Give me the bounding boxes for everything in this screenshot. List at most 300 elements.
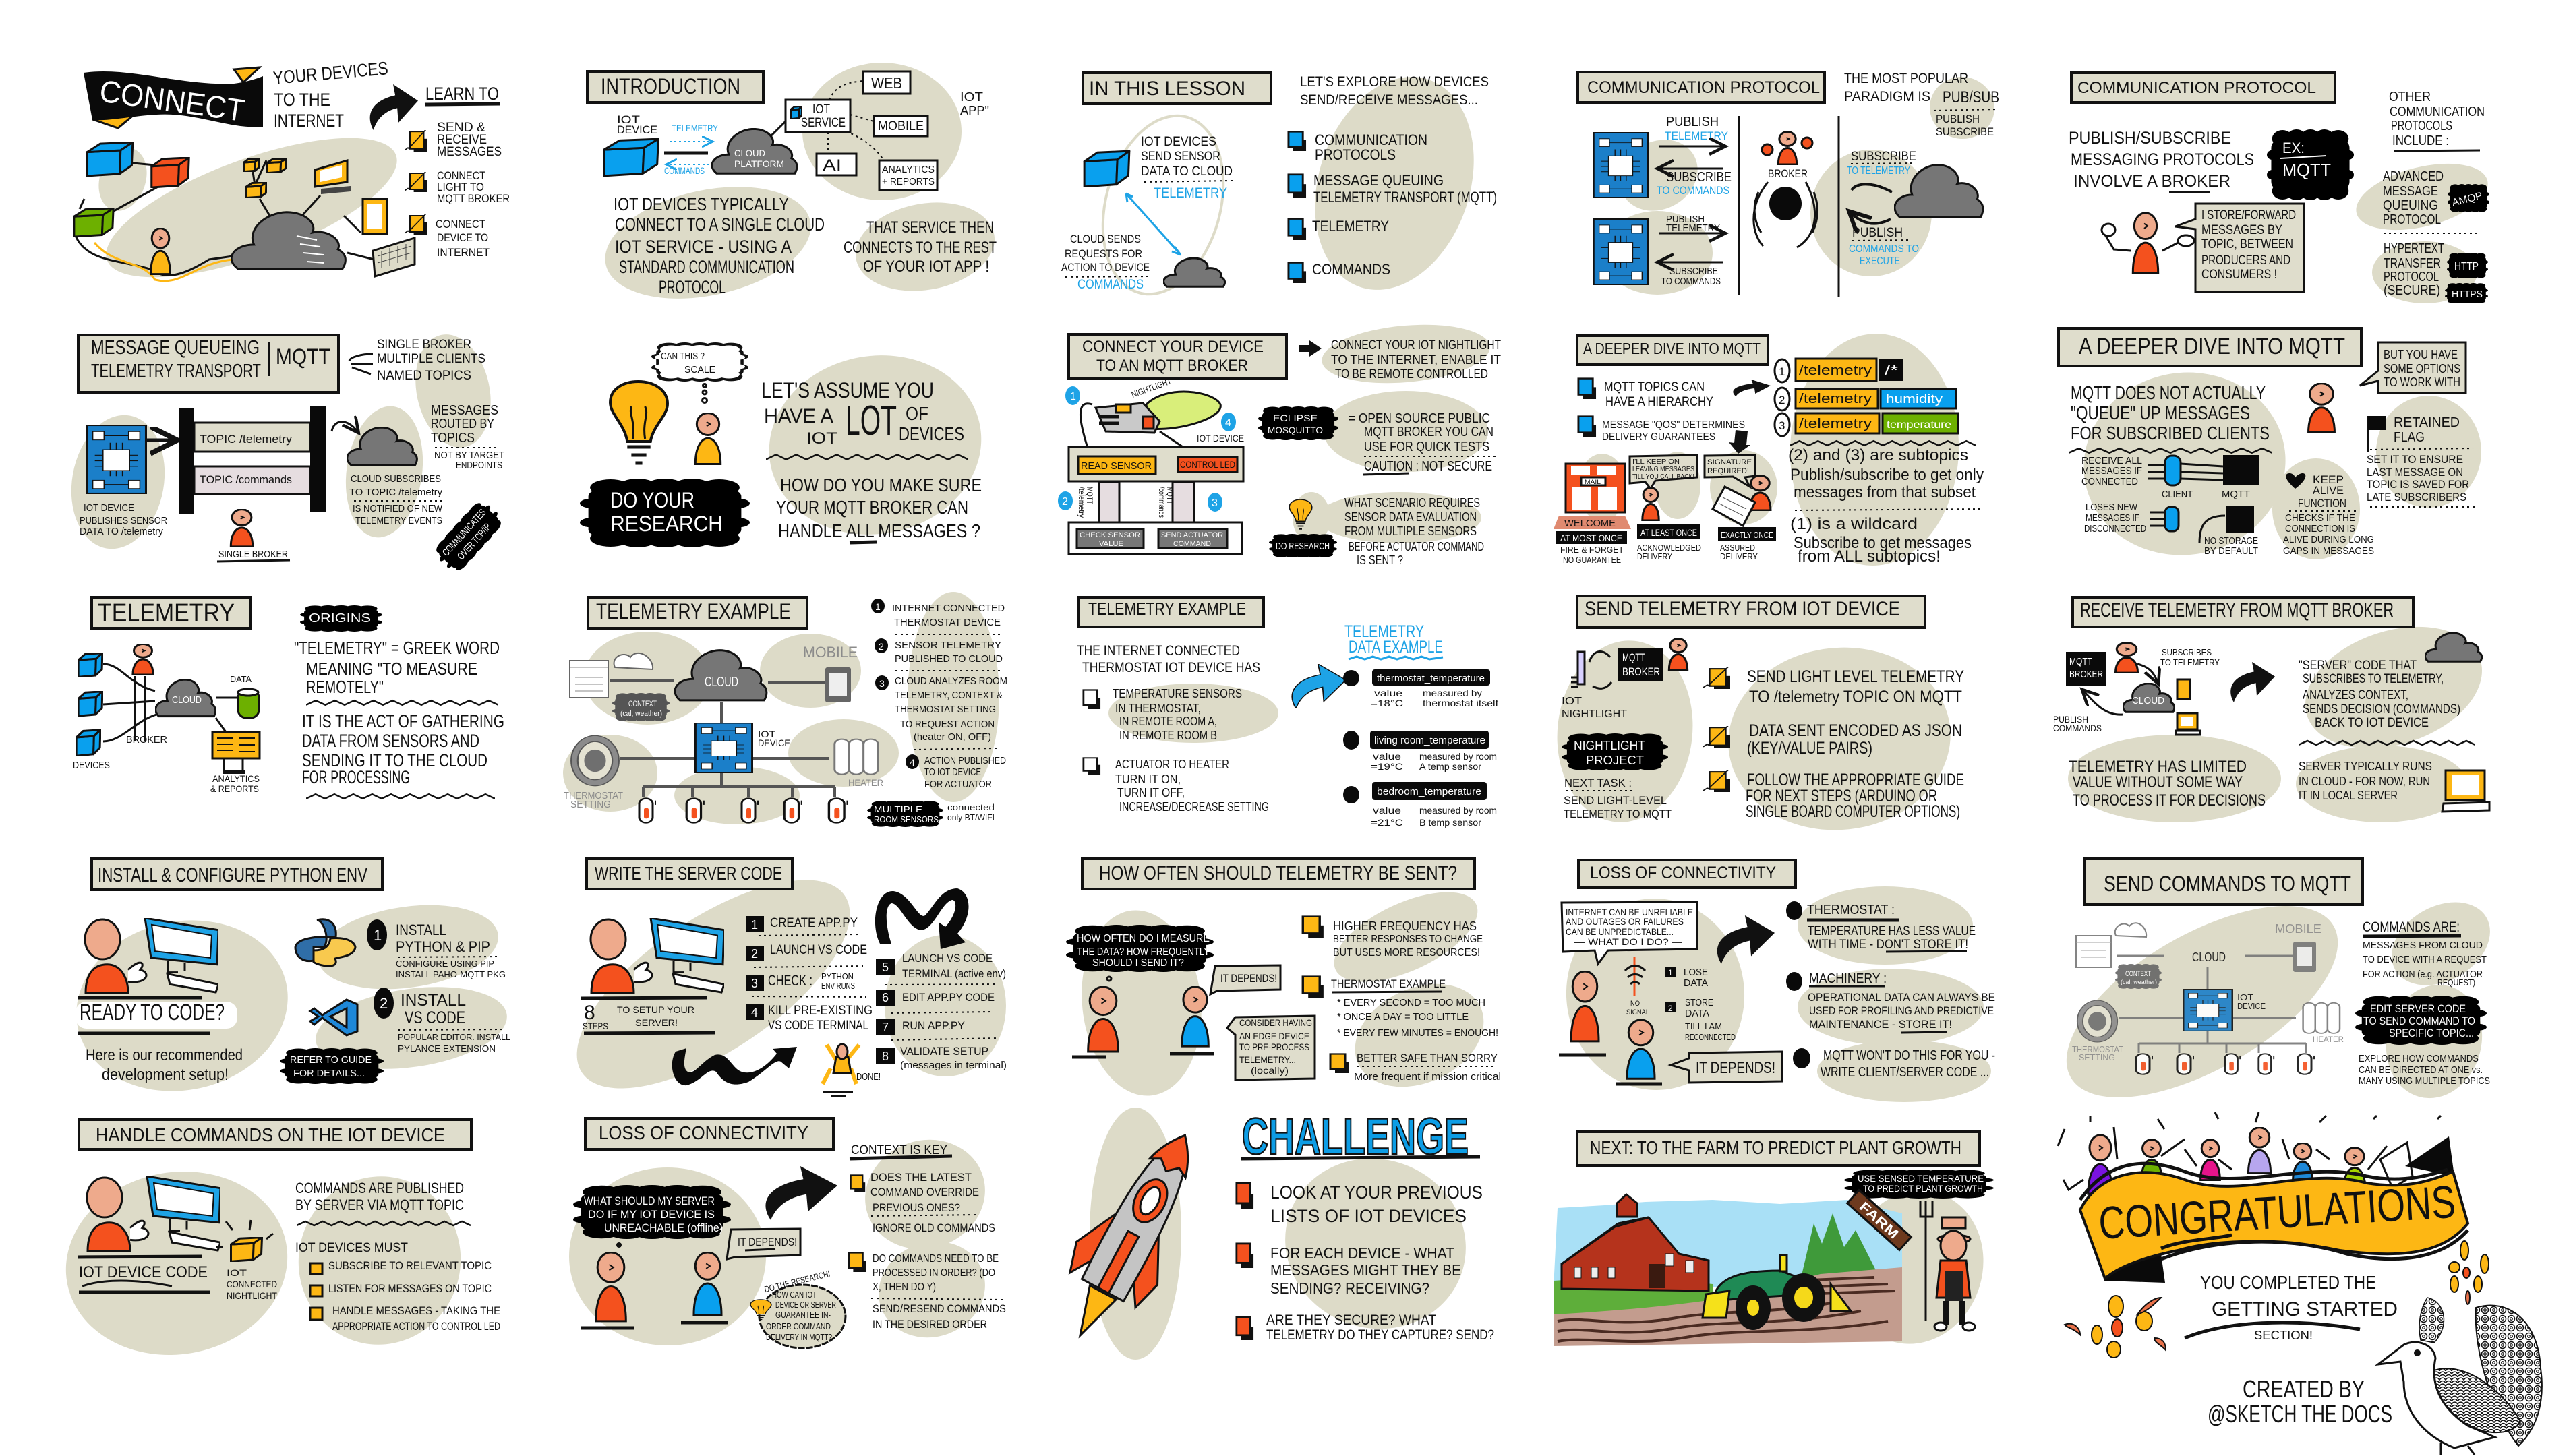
telemetry data example: =18°C (1371, 698, 1403, 708)
numbered steps: ENV RUNS (821, 981, 855, 991)
panel: congratulations (2058, 1112, 2542, 1455)
step 1: 1 (374, 927, 382, 944)
numbered explanation: THERMOSTAT DEVICE (894, 617, 1001, 628)
text blocks: IT IN LOCAL SERVER (2299, 789, 2398, 802)
ready to code (76, 998, 243, 1084)
next task: NEXT TASK : (1564, 777, 1632, 789)
completion text: SECTION! (2254, 1329, 2313, 1342)
learn to list: DEVICE TO (437, 231, 488, 244)
step numbers: 3 (1212, 497, 1218, 509)
device to broker diagram: DATA TO /telemetry (80, 526, 163, 537)
cloud subscribe publish: PUBLISH (1852, 226, 1903, 240)
iot chips publish subscribe: PUBLISH (1666, 115, 1719, 129)
device to broker diagram: TOPIC /commands (200, 473, 292, 486)
description: TURN IT ON, (1115, 772, 1181, 786)
features list: NAMED TOPICS (377, 369, 471, 383)
numbered steps: VALIDATE SETUP (900, 1045, 988, 1058)
text block: LET'S ASSUME YOU (761, 378, 934, 402)
person (695, 413, 721, 464)
mqtt flow boxes (1069, 447, 1243, 554)
client mqtt diagram (2081, 455, 2259, 557)
numbered steps: KILL PRE-EXISTING (768, 1004, 873, 1018)
callout: mqtt example: MQTT (2282, 160, 2331, 180)
farm sign (1847, 1190, 1911, 1250)
panel: connect your device (1058, 318, 1501, 567)
device network illustration (74, 142, 415, 281)
telemetry data example: A temp sensor (1419, 761, 1481, 772)
title (2084, 859, 2363, 905)
people (1559, 957, 1662, 1084)
panel: deeper dive topics (1554, 331, 1984, 568)
subtopic explanation: (1) is a wildcard (1790, 515, 1918, 533)
speech: edge device: (locally) (1251, 1065, 1289, 1076)
numbered explanation: 3 (879, 678, 885, 689)
nightlight to broker diagram: IOT (1562, 696, 1582, 707)
research cloud (750, 1269, 846, 1348)
mqtt flow boxes: VALUE (1099, 540, 1123, 548)
mqtt flow boxes: SEND ACTUATOR (1161, 531, 1223, 539)
text block: HAVE A (764, 405, 833, 427)
text block: HOW DO YOU MAKE SURE (780, 475, 982, 495)
thought bubble: SHOULD I SEND IT? (1092, 957, 1184, 969)
speaker and speech bubble: SOME OPTIONS (2384, 362, 2460, 375)
panel: loss of connectivity thermostat (1559, 860, 1995, 1102)
thermostat system diagram: CONTEXT (628, 699, 657, 708)
text block: HANDLE ALL MESSAGES ? (778, 520, 980, 541)
considerations list: * EVERY SECOND = TOO MUCH (1337, 997, 1485, 1008)
numbered explanation: 1 (875, 601, 881, 612)
background blobs (61, 328, 500, 556)
iot app diagram (604, 71, 989, 190)
commands text: REQUEST) (2437, 977, 2475, 988)
cloud subscribe publish: EXECUTE (1860, 255, 1900, 267)
keep alive function (2283, 473, 2374, 557)
cloud subscribe publish (1847, 150, 1983, 267)
considerations list: HIGHER FREQUENCY HAS (1333, 919, 1477, 933)
thought bubble: THE DATA? HOW FREQUENTLY (1077, 946, 1210, 958)
thermostat system diagram (564, 644, 883, 822)
background blobs (60, 894, 512, 1110)
title: MQTT (276, 344, 330, 369)
thermostat and machinery text: MQTT WON'T DO THIS FOR YOU - (1823, 1048, 1995, 1063)
cheering people (2058, 1112, 2441, 1194)
numbered steps: 2 (751, 947, 758, 961)
description: IN REMOTE ROOM B (1119, 729, 1217, 742)
numbered explanation: 2 (879, 641, 884, 652)
numbered steps: CHECK : (768, 972, 812, 989)
background blobs (2068, 605, 2497, 822)
text block: YOUR MQTT BROKER CAN (776, 497, 968, 518)
numbered explanation: TO REQUEST ACTION (900, 719, 995, 730)
main text: FOR SUBSCRIBED CLIENTS (2071, 423, 2270, 444)
pub sub text (2069, 129, 2254, 192)
step 2: POPULAR EDITOR. INSTALL (398, 1032, 510, 1042)
background blobs (1602, 71, 1999, 295)
instructions text: WHAT SCENARIO REQUIRES (1344, 496, 1480, 510)
context is key text: SEND/RESEND COMMANDS (873, 1302, 1006, 1315)
retained flag: LATE SUBSCRIBERS (2367, 491, 2466, 504)
title: MESSAGE QUEUEING (91, 337, 260, 359)
iot app diagram: APP" (960, 104, 989, 117)
callout: edit server code: TO SEND COMMAND TO (2363, 1014, 2475, 1027)
title: LOSS OF CONNECTIVITY (599, 1122, 808, 1143)
step 1: INSTALL (396, 921, 446, 938)
qos levels: ACKNOWLEDGED (1637, 543, 1701, 553)
thermostat system diagram: SETTING (570, 799, 611, 810)
title (2071, 73, 2335, 102)
telemetry loop diagram: DATA TO CLOUD (1141, 164, 1233, 179)
iot chips publish subscribe: TO COMMANDS (1661, 276, 1721, 287)
broker and cloud diagram (2053, 642, 2220, 735)
numbered explanation: INTERNET CONNECTED (892, 603, 1005, 614)
research cloud: DELIVERY IN MQTT? (766, 1332, 832, 1342)
telemetry data example: living room_temperature (1374, 735, 1485, 746)
command system diagram: CONTEXT (2125, 970, 2151, 978)
iot nightlight cube (216, 1220, 277, 1301)
qos levels (1554, 455, 1776, 565)
completion text: GETTING STARTED (2212, 1298, 2398, 1321)
other protocols: HTTP (2454, 261, 2479, 272)
device to broker diagram: CLOUD SUBSCRIBES (351, 473, 441, 485)
background blobs (1293, 318, 1492, 543)
title banner: CONNECT (98, 73, 247, 128)
step numbers: 1 (1070, 391, 1076, 402)
telemetry data example: bedroom_temperature (1377, 786, 1481, 797)
numbered steps: CREATE APP.PY (770, 916, 858, 930)
retained flag: SET IT TO ENSURE (2367, 453, 2463, 466)
numbered explanation: (heater ON, OFF) (914, 731, 991, 743)
numbered steps: LAUNCH VS CODE (770, 943, 867, 957)
options: DATA (1685, 1008, 1709, 1019)
other protocols: TRANSFER (2384, 256, 2441, 271)
nightlight device: NIGHTLIGHT (1130, 376, 1173, 400)
step 1: PYTHON & PIP (396, 938, 490, 955)
other protocols: HTTPS (2452, 289, 2483, 300)
flowers (2065, 1241, 2489, 1358)
main text: MQTT DOES NOT ACTUALLY (2071, 382, 2266, 403)
callout: nightlight project: NIGHTLIGHT (1574, 739, 1645, 752)
background blob (1827, 1173, 2003, 1362)
subtopic explanation (1788, 446, 1984, 566)
other protocols: PROTOCOLS (2391, 119, 2452, 133)
iot app diagram: AI (823, 156, 841, 175)
thermostat and machinery text: THERMOSTAT : (1807, 903, 1895, 917)
title (1577, 336, 1768, 365)
speech: internet unreliable: AND OUTAGES OR FAILURES (1566, 916, 1684, 927)
command system diagram: CLOUD (2192, 950, 2226, 964)
data flow diagram (73, 644, 260, 794)
numbered steps: (messages in terminal) (900, 1060, 1007, 1071)
iot app diagram: COMMANDS (664, 165, 705, 176)
instructions text: IS SENT ? (1357, 553, 1403, 567)
arrows (1729, 380, 1771, 454)
step 2: VS CODE (405, 1008, 465, 1027)
thermostat system diagram: CLOUD (705, 675, 738, 690)
callout: multiple room sensors: ROOM SENSORS (874, 814, 939, 824)
callout: tcp/ip (431, 497, 506, 576)
pub sub text: MESSAGING PROTOCOLS (2071, 150, 2254, 169)
callout: eclipse mosquitto: MOSQUITTO (1268, 425, 1323, 435)
panel: introduction (587, 63, 1002, 316)
broker speaking (2102, 204, 2304, 292)
mqtt flow boxes: MQTT (1165, 487, 1175, 505)
title: INTRODUCTION (601, 74, 740, 98)
callout: do research: DO RESEARCH (1276, 541, 1330, 552)
checklist (1703, 666, 1964, 821)
speech: it depends: IT DEPENDS! (1220, 972, 1277, 985)
list: SEND/RECEIVE MESSAGES... (1300, 92, 1478, 108)
thought bubble (1066, 925, 1214, 972)
thought cloud (651, 342, 748, 403)
title (585, 1118, 833, 1149)
options: STORE (1685, 997, 1713, 1008)
device to broker diagram: PUBLISHES SENSOR (80, 515, 167, 526)
instructions text: TO BE REMOTE CONTROLLED (1335, 367, 1488, 382)
callout: origins (300, 605, 382, 632)
context is key text: COMMAND OVERRIDE (870, 1186, 979, 1199)
list: COMMUNICATION (1315, 131, 1427, 148)
commands text (2359, 919, 2490, 1087)
callout: do your research: RESEARCH (610, 512, 723, 536)
step numbers (1058, 386, 1236, 512)
command system diagram: (cal, weather) (2121, 979, 2157, 985)
text blocks: TELEMETRY HAS LIMITED (2069, 758, 2247, 776)
context is key text (849, 1143, 1006, 1331)
icon: research bulb (1289, 499, 1312, 529)
panel: communication protocol broker (2069, 73, 2495, 303)
definition text: DATA FROM SENSORS AND (302, 731, 479, 751)
thought bubble: WHAT SHOULD MY SERVER (584, 1194, 715, 1207)
panel: send telemetry from iot device (1548, 596, 1964, 841)
features list: ROUTED BY (431, 417, 494, 431)
keep alive function: ALIVE DURING LONG (2283, 534, 2374, 545)
peacock (2378, 1298, 2542, 1455)
title: COMMUNICATION PROTOCOL (1587, 78, 1820, 97)
main text (2069, 382, 2272, 453)
features list: MESSAGES (431, 403, 498, 418)
nightlight to broker diagram (1562, 638, 1688, 720)
credit: CREATED BY (2243, 1375, 2365, 1403)
title (588, 597, 807, 628)
numbered steps: 6 (882, 991, 889, 1004)
client mqtt diagram: MESSAGES IF (2081, 465, 2142, 477)
other protocols: PROTOCOL (2383, 212, 2441, 227)
speech: edge device: CONSIDER HAVING (1239, 1017, 1312, 1028)
considerations list: * ONCE A DAY = TOO LITTLE (1337, 1011, 1469, 1023)
title: INSTALL & CONFIGURE PYTHON ENV (98, 864, 367, 886)
challenge questions (1237, 1182, 1494, 1343)
background blobs (2037, 868, 2505, 1136)
description: THERMOSTAT IOT DEVICE HAS (1082, 660, 1260, 675)
subtopic explanation: (2) and (3) are subtopics (1788, 446, 1968, 464)
challenge questions: LOOK AT YOUR PREVIOUS (1270, 1182, 1483, 1203)
other protocols: INCLUDE : (2392, 133, 2449, 148)
speech: edge device: AN EDGE DEVICE (1239, 1031, 1309, 1041)
commands text and list: IOT DEVICES MUST (295, 1241, 408, 1255)
telemetry data example: value (1374, 688, 1402, 698)
telemetry data example: =21°C (1371, 817, 1403, 828)
learn to list: CONNECT (436, 218, 485, 231)
bullets: HAVE A HIERARCHY (1605, 395, 1713, 409)
instructions text: = OPEN SOURCE PUBLIC (1349, 411, 1490, 426)
commands text: MESSAGES FROM CLOUD (2363, 940, 2483, 951)
steps summary: TO SETUP YOUR (617, 1004, 694, 1015)
checklist: DATA SENT ENCODED AS JSON (1749, 721, 1962, 740)
iot app diagram: PLATFORM (734, 158, 784, 169)
subtopic explanation: from ALL subtopics! (1798, 547, 1941, 566)
thermostat system diagram: THERMOSTAT (564, 790, 623, 801)
blue arrow (1292, 664, 1346, 708)
numbered steps: PYTHON (821, 971, 854, 981)
keep alive function: KEEP (2313, 473, 2344, 486)
thought bubble: UNREACHABLE (offline) (604, 1221, 723, 1234)
thought bubble: HOW OFTEN DO I MEASURE (1077, 933, 1210, 944)
title: TELEMETRY EXAMPLE (596, 599, 791, 624)
broker speaking: CONSUMERS ! (2201, 268, 2277, 282)
iot chips publish subscribe: PUBLISH (1666, 214, 1705, 225)
paradigm text: PUB/SUB (1943, 88, 1999, 107)
iot app diagram: IOT (812, 102, 830, 117)
qos levels: FIRE & FORGET (1560, 545, 1624, 555)
background blobs (1560, 886, 1991, 1102)
completion text: YOU COMPLETED THE (2200, 1272, 2376, 1293)
instructions text: TO THE INTERNET, ENABLE IT (1331, 353, 1501, 367)
thermostat and machinery text: TEMPERATURE HAS LESS VALUE (1808, 924, 1976, 938)
title (2073, 597, 2413, 627)
device to broker diagram: IOT DEVICE (84, 502, 134, 514)
bullets: DELIVERY GUARANTEES (1602, 431, 1715, 443)
telemetry data example: value (1373, 751, 1401, 762)
paradigm text: THE MOST POPULAR (1844, 71, 1968, 86)
instructions text: CAUTION : NOT SECURE (1364, 459, 1492, 474)
data flow diagram: & REPORTS (210, 783, 259, 794)
considerations list: BUT USES MORE RESOURCES! (1333, 947, 1480, 959)
cloud subscribe publish: SUBSCRIBE (1851, 150, 1916, 164)
nightlight to broker diagram: BROKER (1622, 665, 1660, 678)
title: TELEMETRY (98, 599, 235, 628)
iot app diagram: WEB (871, 74, 902, 92)
instructions text: FROM MULTIPLE SENSORS (1344, 524, 1477, 538)
title: CHALLENGE (1242, 1108, 1469, 1165)
nightlight to broker diagram: NIGHTLIGHT (1562, 708, 1627, 720)
title: HANDLE COMMANDS ON THE IOT DEVICE (96, 1124, 445, 1145)
thought bubble: DO IF MY IOT DEVICE IS (588, 1208, 715, 1221)
completion text (2185, 1272, 2398, 1342)
commands text: CAN BE DIRECTED AT ONE vs. (2359, 1064, 2483, 1076)
icon: python logo (295, 919, 355, 966)
qos levels: AT LEAST ONCE (1640, 527, 1697, 538)
background blobs (563, 592, 999, 824)
numbered steps: RUN APP.PY (902, 1019, 965, 1032)
options: 2 (1668, 1004, 1673, 1013)
mqtt flow boxes: CHECK SENSOR (1080, 531, 1140, 539)
pub sub text: INVOLVE A BROKER (2073, 172, 2230, 191)
features list: MULTIPLE CLIENTS (377, 352, 485, 366)
title: COMMUNICATION PROTOCOL (2077, 79, 2316, 97)
title (92, 859, 382, 890)
qos levels: WELCOME (1564, 518, 1616, 529)
options: LOSE (1684, 967, 1708, 978)
intro text: TO THE (274, 90, 330, 110)
panel: telemetry (73, 597, 504, 799)
mqtt flow boxes: CONTROL LED (1180, 459, 1235, 470)
thermostat and machinery text: OPERATIONAL DATA CAN ALWAYS BE (1808, 991, 1995, 1004)
command system diagram: SETTING (2079, 1052, 2115, 1062)
ready to code: Here is our recommended (86, 1046, 243, 1064)
subtopic explanation: Publish/subscribe to get only (1790, 466, 1984, 484)
options: TILL I AM (1685, 1021, 1722, 1031)
learn to list: INTERNET (437, 246, 490, 259)
text blocks: SENDS DECISION (COMMANDS) (2303, 702, 2460, 717)
challenge questions: FOR EACH DEVICE - WHAT (1270, 1244, 1454, 1262)
numbered explanation: TELEMETRY, CONTEXT & (895, 690, 1003, 701)
people: NO (1630, 1000, 1640, 1008)
panel: next farm (1554, 1132, 2003, 1362)
steps summary: SERVER! (635, 1017, 678, 1028)
speech: it depends (727, 1229, 800, 1259)
body text (614, 194, 997, 297)
arrow (2230, 662, 2275, 702)
device to broker diagram: TELEMETRY EVENTS (355, 515, 442, 526)
panel: install python (60, 859, 512, 1110)
context is key text: DO COMMANDS NEED TO BE (873, 1253, 999, 1265)
text block: OF (906, 403, 928, 424)
broker speaking: TOPIC, BETWEEN (2201, 237, 2293, 251)
text blocks: BACK TO IOT DEVICE (2315, 716, 2429, 730)
thermostat and machinery text: WRITE CLIENT/SERVER CODE ... (1821, 1065, 1989, 1080)
qos levels: ASSURED (1720, 543, 1755, 553)
considerations list: BETTER SAFE THAN SORRY (1357, 1052, 1498, 1064)
ready to code: development setup! (102, 1066, 229, 1084)
research cloud: ORDER COMMAND (766, 1321, 831, 1331)
callout: multiple room sensors: only BT/WIFI (947, 812, 995, 822)
thought bubble (573, 1185, 731, 1239)
topic hierarchy: /telemetry (1799, 417, 1872, 431)
text blocks (2069, 659, 2475, 810)
speech: it depends (1671, 1052, 1782, 1083)
telemetry data example: DATA EXAMPLE (1349, 638, 1443, 657)
panel: telemetry example data (1077, 597, 1498, 828)
arrow: bottom swirl (672, 1047, 797, 1085)
instructions text: SENSOR DATA EVALUATION (1344, 510, 1477, 524)
keep alive function: GAPS IN MESSAGES (2283, 545, 2374, 557)
body text: PROTOCOL (659, 277, 726, 297)
description: TEMPERATURE SENSORS (1113, 687, 1242, 700)
step 2: INSTALL (401, 991, 466, 1010)
commands text and list: COMMANDS ARE PUBLISHED (295, 1180, 464, 1196)
telemetry loop diagram: CLOUD SENDS (1070, 233, 1141, 245)
telemetry loop diagram (1061, 102, 1242, 307)
telemetry loop diagram: COMMANDS (1077, 278, 1144, 292)
description: THE INTERNET CONNECTED (1077, 643, 1240, 659)
device to broker diagram: TOPIC /telemetry (200, 433, 293, 446)
considerations list: More frequent if mission critical (1354, 1071, 1501, 1083)
title: TELEMETRY EXAMPLE (1088, 599, 1246, 619)
thermostat system diagram: HEATER (848, 777, 883, 788)
panel: mqtt overview (61, 328, 506, 576)
title: TELEMETRY TRANSPORT (91, 361, 261, 382)
topic hierarchy: 3 (1779, 419, 1785, 432)
callout: origins: ORIGINS (309, 611, 371, 625)
mqtt flow boxes: /telemetry (1077, 487, 1086, 518)
telemetry data example: B temp sensor (1419, 817, 1481, 828)
features list (349, 338, 504, 471)
numbered explanation: PUBLISHED TO CLOUD (895, 653, 1003, 665)
panel: receive telemetry from mqtt broker (2053, 597, 2497, 822)
title (587, 859, 792, 889)
intro text: INTERNET (274, 111, 344, 131)
checklist: SEND LIGHT LEVEL TELEMETRY (1747, 667, 1964, 686)
